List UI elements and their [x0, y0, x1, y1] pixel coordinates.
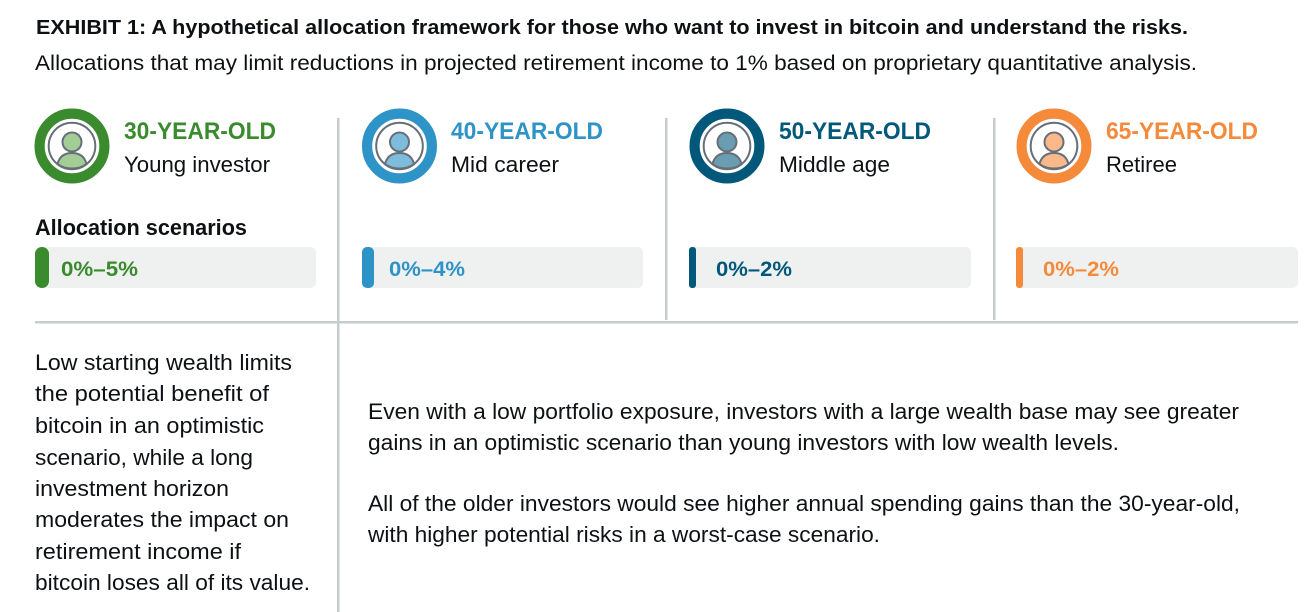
- text block: large wealth base explanation: [368, 399, 1239, 455]
- panel: 40-year-old: [362, 114, 643, 288]
- age heading: 40-YEAR-OLD: [451, 118, 603, 145]
- allocation bar: 0%–4%: [389, 258, 465, 281]
- allocation bar: [362, 247, 643, 288]
- allocation bar: [1016, 247, 1298, 288]
- allocation heading: Allocation scenarios: [35, 215, 247, 240]
- text block: young investor explanation: the potential benefit of: [35, 381, 270, 406]
- text block: young investor explanation: bitcoin loses all of its value.: [35, 570, 310, 595]
- life stage: Middle age: [779, 152, 890, 177]
- title: EXHIBIT 1: A hypothetical allocation framework for those who want to invest in bitcoin and understand the risks.: [36, 17, 1188, 39]
- icon: navy investor: [695, 114, 759, 178]
- allocation bar: 0%–5%: [61, 258, 138, 281]
- subtitle: Allocations that may limit reductions in projected retirement income to 1% based on proprietary quantitative analysis.: [35, 52, 1197, 75]
- text block: young investor explanation: retirement income if: [35, 539, 242, 564]
- icon: green investor: [40, 114, 104, 178]
- text block: young investor explanation: moderates the impact on: [35, 507, 289, 532]
- panel: 65-year-old: [1016, 114, 1298, 288]
- panel: 50-year-old: [689, 114, 971, 288]
- life stage: Retiree: [1106, 152, 1177, 177]
- icon: blue investor: [367, 114, 432, 178]
- age heading: 65-YEAR-OLD: [1106, 118, 1258, 145]
- text block: young investor explanation: [35, 350, 310, 595]
- allocation bar: [35, 247, 316, 288]
- age heading: 30-YEAR-OLD: [124, 118, 276, 145]
- text block: older investors explanation: All of the older investors would see higher annual spending gains than the 30-year-old,: [368, 491, 1240, 516]
- text block: young investor explanation: investment horizon: [35, 476, 229, 501]
- text block: large wealth base explanation: Even with a low portfolio exposure, investors with a large wealth base may see greater: [368, 399, 1239, 424]
- allocation bar: 0%–2%: [716, 258, 792, 281]
- allocation bar: [689, 247, 971, 288]
- text block: young investor explanation: scenario, while a long: [35, 445, 253, 470]
- age heading: 50-YEAR-OLD: [779, 118, 931, 145]
- text block: young investor explanation: Low starting wealth limits: [35, 350, 292, 375]
- allocation bar: 0%–2%: [1043, 258, 1119, 281]
- icon: orange investor: [1022, 114, 1086, 178]
- text block: older investors explanation: with higher potential risks in a worst-case scenario.: [367, 522, 880, 547]
- text block: older investors explanation: [367, 491, 1240, 547]
- panel: 30-year-old: [35, 114, 316, 288]
- text block: young investor explanation: bitcoin in an optimistic: [35, 413, 264, 438]
- text block: large wealth base explanation: gains in an optimistic scenario than young investors with low wealth levels.: [368, 430, 1119, 455]
- life stage: Young investor: [124, 152, 270, 177]
- life stage: Mid career: [451, 152, 559, 177]
